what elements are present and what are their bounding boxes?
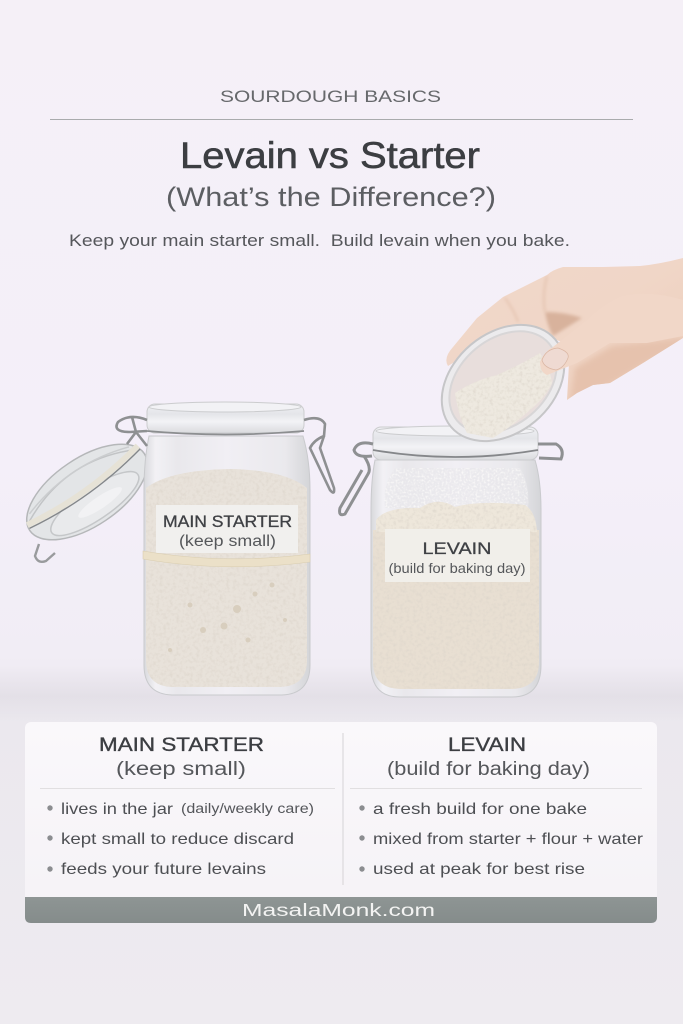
hand holding bowl — [440, 258, 683, 442]
jar: main starter — [11, 402, 334, 695]
levain contents — [373, 530, 539, 689]
column: levain: (build for baking day) — [387, 759, 590, 780]
left clasp — [116, 417, 147, 446]
bowl — [419, 301, 587, 465]
column: main starter — [47, 735, 314, 878]
column: main starter: lives in the jar — [61, 801, 174, 818]
label: (build for baking day) — [388, 560, 526, 576]
column: levain: LEVAIN — [448, 735, 526, 756]
label: (keep small) — [179, 533, 276, 550]
flour in bowl — [455, 353, 552, 438]
starter contents — [146, 469, 307, 687]
tagline: Keep your main starter small. Build levain when you bake. — [69, 231, 570, 250]
left clasp — [340, 443, 373, 515]
rim — [373, 427, 538, 460]
column: levain: mixed from starter + flour + water — [373, 831, 644, 848]
right clasp — [304, 418, 334, 493]
subtitle: (What’s the Difference?) — [166, 182, 496, 212]
footer bar: MasalaMonk.com — [242, 900, 435, 920]
glass body — [371, 460, 541, 697]
rim — [147, 404, 304, 433]
column: levain: used at peak for best rise — [373, 861, 585, 878]
footer bar — [25, 897, 657, 923]
comparison panel — [25, 722, 657, 923]
bubbles — [168, 582, 287, 652]
label — [385, 529, 530, 582]
column: levain — [359, 735, 644, 878]
label: MAIN STARTER — [163, 513, 292, 531]
flour top layer — [376, 502, 537, 532]
rubber band — [143, 551, 310, 567]
column: main starter: feeds your future levains — [61, 861, 266, 878]
label — [156, 505, 298, 553]
right clasp — [538, 444, 562, 459]
metal clasp band — [147, 431, 304, 434]
open lid — [11, 425, 163, 559]
thumb — [540, 294, 683, 375]
column: main starter: (keep small) — [116, 759, 246, 780]
metal clasp band — [373, 450, 538, 457]
hand shading — [505, 276, 683, 402]
column: main starter: (daily/weekly care) — [181, 801, 314, 816]
kicker: sourdough basics: SOURDOUGH BASICS — [220, 88, 441, 106]
title: Levain vs Starter — [180, 135, 480, 176]
column: main starter: kept small to reduce discard — [61, 831, 294, 848]
table shadow under jars — [0, 665, 683, 722]
column: levain: a fresh build for one bake — [373, 801, 587, 818]
thumbnail — [542, 348, 568, 370]
glass body — [144, 436, 310, 695]
label: LEVAIN — [422, 539, 492, 558]
speckle on inner glass — [384, 468, 528, 508]
lid handle wire — [35, 544, 55, 562]
hand — [446, 258, 683, 400]
jar: levain — [340, 426, 562, 697]
column: main starter: MAIN STARTER — [99, 735, 264, 756]
